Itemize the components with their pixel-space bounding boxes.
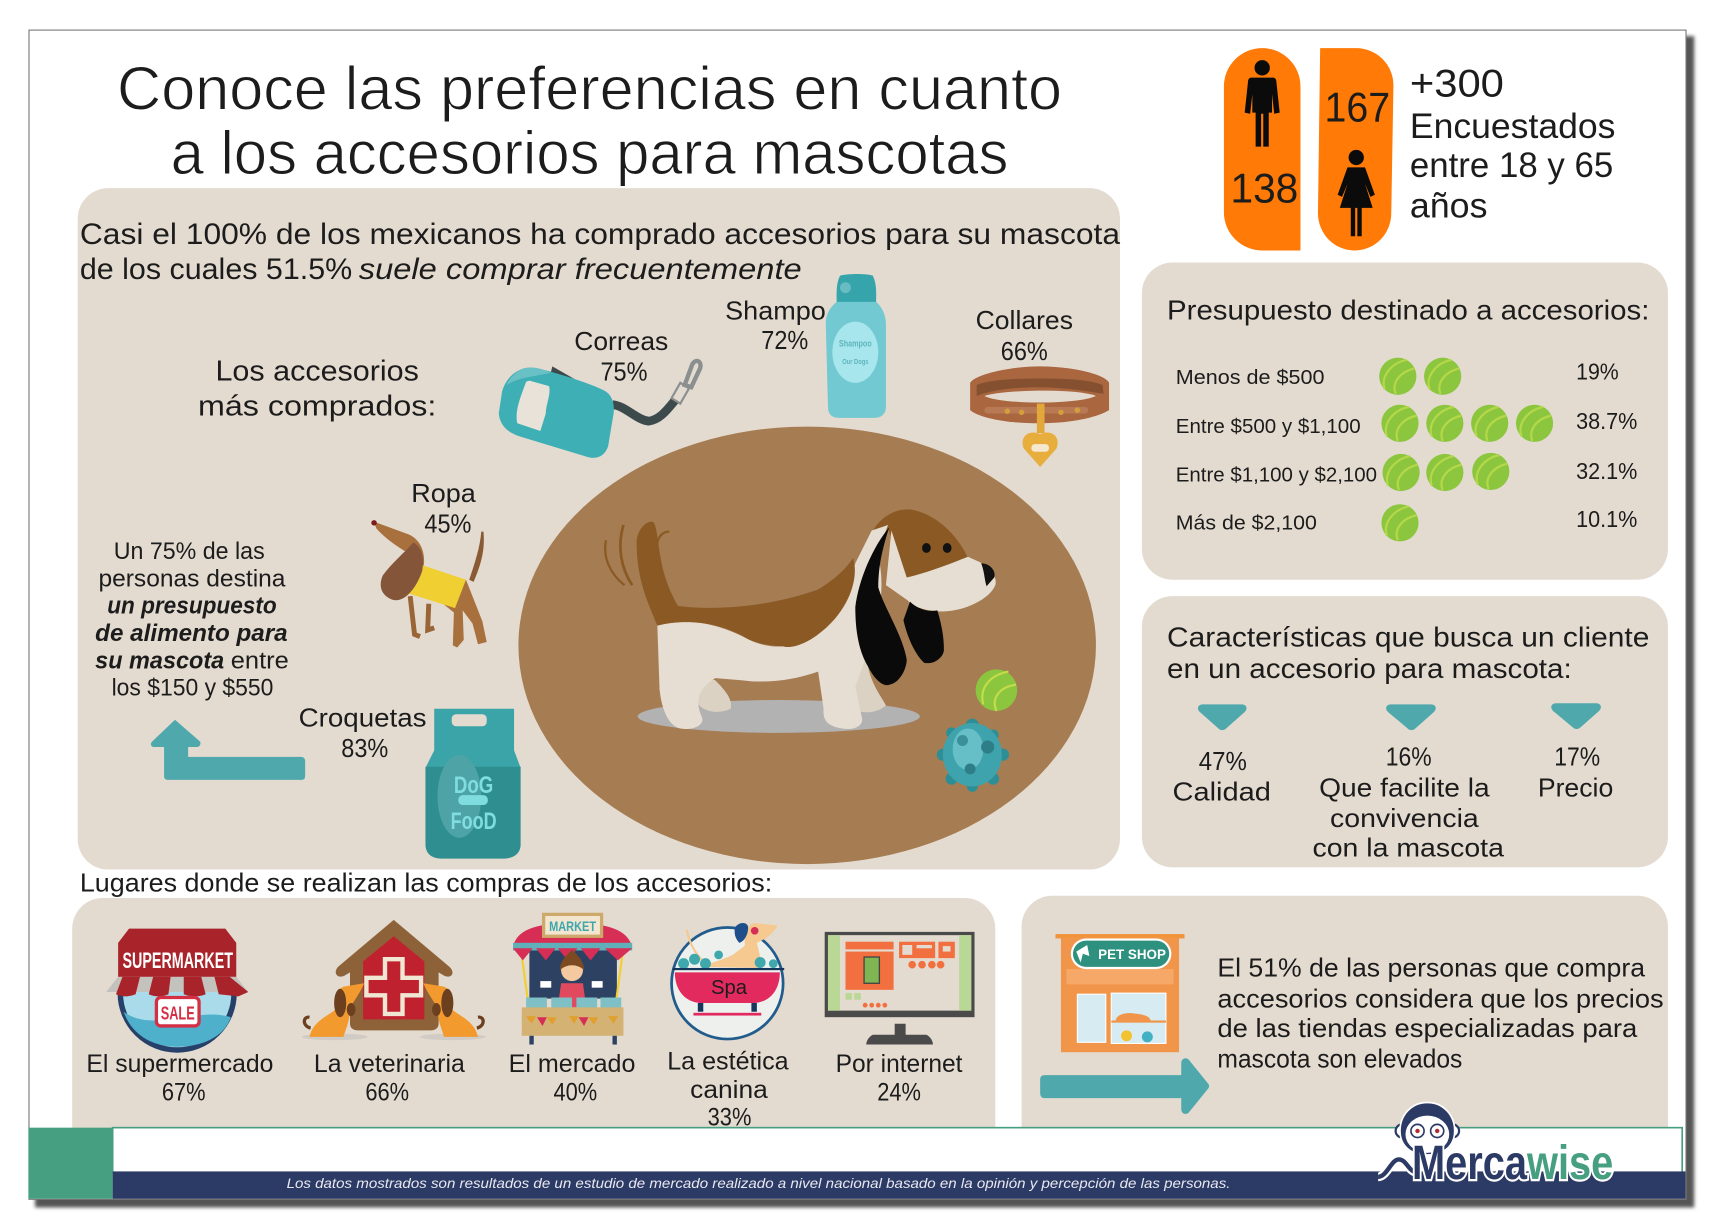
heading: los accesorios más comprados: más comprados: bbox=[198, 391, 436, 423]
text: precios elevados: accesorios considera que los precios bbox=[1217, 985, 1664, 1013]
intro text: Casi el 100% de los mexicanos ha comprado accesorios para su mascota bbox=[80, 218, 1121, 251]
stat: calidad: 47% bbox=[1199, 746, 1247, 776]
label: internet: Por internet bbox=[836, 1050, 963, 1078]
label: supermercado: 67% bbox=[162, 1078, 206, 1106]
label: internet: 24% bbox=[877, 1078, 921, 1106]
label: internet bbox=[836, 1050, 963, 1106]
label: ropa bbox=[411, 478, 476, 539]
text block: presupuesto de alimento bbox=[95, 538, 289, 702]
footer bbox=[28, 1128, 1685, 1199]
heading: los accesorios más comprados: Los accesorios bbox=[215, 356, 419, 388]
icon: spiked ball bbox=[937, 719, 1009, 792]
row: 500 a 1100: 38.7% bbox=[1576, 408, 1637, 434]
number: 138: 138 bbox=[1230, 164, 1298, 211]
heading: presupuesto: Presupuesto destinado a accesorios: bbox=[1167, 294, 1649, 325]
intro text: de los cuales 51.5% bbox=[80, 253, 352, 286]
icon: mercado: MARKET bbox=[549, 919, 596, 935]
text block: presupuesto de alimento: Un 75% de las bbox=[114, 538, 265, 565]
label: collares bbox=[976, 305, 1073, 366]
text block: presupuesto de alimento: un presupuesto bbox=[107, 593, 277, 620]
label: correas bbox=[574, 326, 668, 387]
stat: convivencia: 16% bbox=[1386, 742, 1432, 772]
label: croquetas: 83% bbox=[341, 733, 388, 763]
label: veterinaria: 66% bbox=[365, 1078, 409, 1106]
title: a los accesorios para mascotas bbox=[171, 119, 1008, 187]
text block: presupuesto de alimento: los $150 y $550 bbox=[112, 675, 273, 702]
icon: dog food bag: FooD bbox=[451, 808, 497, 835]
label: estetica canina: canina bbox=[690, 1076, 768, 1104]
icon: estetica bbox=[672, 923, 784, 1039]
row: 1100 a 2100 bbox=[1176, 453, 1637, 491]
icon: shampoo bottle: Our Dogs bbox=[842, 357, 868, 366]
label: shampoo: 72% bbox=[761, 325, 808, 355]
icon: collar bbox=[970, 366, 1109, 467]
row: 1100 a 2100: 32.1% bbox=[1576, 458, 1637, 484]
label: veterinaria: La veterinaria bbox=[314, 1050, 465, 1078]
panel: tiendas especializadas bbox=[1022, 896, 1668, 1138]
label: croquetas: Croquetas bbox=[299, 702, 427, 732]
icon: pet shop bbox=[1055, 934, 1185, 1052]
intro text bbox=[80, 218, 1121, 286]
text block: presupuesto de alimento: personas destina bbox=[98, 565, 286, 592]
footer note: Los datos mostrados son resultados de un estudio de mercado realizado a nivel nacional basado en la opinión y percepción de las personas. bbox=[287, 1176, 1230, 1192]
row: 500 a 1100: Entre $500 y $1,100 bbox=[1176, 415, 1361, 438]
heading: caracteristicas: Características que busca un cliente bbox=[1167, 621, 1649, 652]
dog right bbox=[423, 983, 483, 1037]
icon: supermarket: SALE bbox=[161, 1002, 195, 1023]
icon: small dog with vest bbox=[371, 520, 487, 648]
row: 500 a 1100 bbox=[1176, 405, 1637, 442]
intro text: suele comprar frecuentemente bbox=[359, 253, 802, 286]
text: precios elevados: de las tiendas especializadas para bbox=[1217, 1015, 1638, 1043]
logo: mercawise bbox=[1378, 1103, 1613, 1190]
label: supermercado bbox=[86, 1050, 273, 1106]
illustration: brown circle bbox=[518, 427, 1096, 864]
heading: caracteristicas: en un accesorio para mascota: bbox=[1167, 653, 1572, 684]
label: mercado: 40% bbox=[553, 1078, 597, 1106]
label: supermercado: El supermercado bbox=[86, 1050, 273, 1078]
label: ropa: 45% bbox=[424, 509, 471, 539]
icon: monkey bbox=[1396, 1103, 1459, 1155]
label: veterinaria bbox=[314, 1050, 465, 1106]
text: precios elevados: El 51% de las personas que compra bbox=[1217, 955, 1646, 983]
stat: convivencia: Que facilite la bbox=[1319, 772, 1490, 802]
text: precios elevados: mascota son elevados bbox=[1217, 1046, 1462, 1074]
icon: dog food bag bbox=[425, 709, 521, 859]
label: collares: Collares bbox=[976, 305, 1073, 335]
text: precios elevados bbox=[1217, 955, 1664, 1074]
row: mas de 2100 bbox=[1176, 504, 1637, 541]
pill: men bbox=[1224, 48, 1300, 250]
label: correas: 75% bbox=[600, 357, 648, 387]
row: 1100 a 2100: Entre $1,100 y $2,100 bbox=[1176, 463, 1377, 486]
icon: shampoo bottle bbox=[826, 274, 886, 418]
icon: internet bbox=[825, 932, 975, 1045]
row: mas de 2100: Más de $2,100 bbox=[1176, 511, 1317, 534]
panel: lugares bbox=[72, 898, 995, 1138]
text: encuestados: años bbox=[1410, 187, 1488, 226]
logo: mercawise: Mercawise bbox=[1412, 1136, 1613, 1190]
label: croquetas bbox=[299, 702, 427, 763]
label: correas: Correas bbox=[574, 326, 668, 356]
number: 167: 167 bbox=[1325, 83, 1390, 130]
arrow: right bbox=[1040, 1058, 1209, 1114]
text: encuestados: Encuestados bbox=[1410, 107, 1615, 146]
stat: calidad: Calidad bbox=[1172, 777, 1271, 807]
icon: supermarket bbox=[106, 929, 248, 1050]
text block: presupuesto de alimento: entre bbox=[231, 647, 289, 674]
heading: caracteristicas bbox=[1167, 621, 1649, 684]
icon: pet shop: PET SHOP bbox=[1098, 947, 1166, 963]
icon: veterinaria bbox=[302, 920, 486, 1040]
front far leg bbox=[842, 656, 886, 712]
label: shampoo bbox=[725, 295, 826, 355]
label: shampoo: Shampo bbox=[725, 295, 826, 325]
stat: convivencia: convivencia bbox=[1330, 803, 1479, 833]
footer green block bbox=[28, 1128, 113, 1199]
pill: women bbox=[1318, 48, 1393, 250]
label: estetica canina: La estética bbox=[667, 1048, 789, 1076]
icon: woman bbox=[1338, 150, 1375, 236]
text: encuestados bbox=[1410, 61, 1615, 226]
title: Conoce las preferencias en cuanto bbox=[117, 54, 1062, 122]
icon: dog food bag: DoG bbox=[454, 772, 493, 799]
stat: calidad bbox=[1172, 746, 1271, 807]
text block: presupuesto de alimento: su mascota bbox=[95, 647, 224, 674]
icon: shampoo bottle: Shampoo bbox=[839, 339, 872, 349]
text: encuestados: entre 18 y 65 bbox=[1410, 146, 1613, 185]
label: mercado: El mercado bbox=[509, 1050, 635, 1078]
row: menos de 500 bbox=[1176, 358, 1619, 395]
text: encuestados: +300 bbox=[1410, 61, 1504, 105]
text block: presupuesto de alimento: de alimento para bbox=[95, 620, 288, 647]
stat: precio bbox=[1538, 742, 1613, 802]
panel: presupuesto bbox=[1142, 263, 1668, 580]
icon: supermarket: SUPERMARKET bbox=[122, 948, 233, 973]
stat: precio: 17% bbox=[1554, 742, 1600, 772]
back far leg bbox=[687, 669, 731, 712]
label: ropa: Ropa bbox=[411, 478, 476, 508]
heading: lugares: Lugares donde se realizan las compras de los accesorios: bbox=[80, 867, 772, 897]
icon: mercado bbox=[513, 914, 632, 1045]
heading: los accesorios más comprados bbox=[198, 356, 436, 423]
label: estetica canina: 33% bbox=[708, 1103, 751, 1131]
icon: tennis ball bbox=[976, 669, 1017, 711]
stat: convivencia: con la mascota bbox=[1312, 832, 1504, 862]
panel: encuestados bbox=[1224, 48, 1615, 250]
panel: caracteristicas bbox=[1142, 596, 1668, 867]
row: menos de 500: 19% bbox=[1576, 359, 1619, 385]
row: menos de 500: Menos de $500 bbox=[1176, 366, 1325, 389]
icon: estetica: Spa bbox=[711, 976, 747, 999]
dog left bbox=[304, 983, 364, 1037]
icon: triangle calidad bbox=[1198, 704, 1247, 730]
footer navy bar bbox=[113, 1171, 1685, 1199]
row: mas de 2100: 10.1% bbox=[1576, 506, 1637, 532]
arrow: up-left bbox=[151, 720, 305, 780]
icon: man bbox=[1245, 60, 1280, 147]
panel: accesorios bbox=[78, 188, 1121, 870]
icon: triangle convivencia bbox=[1386, 704, 1436, 730]
stat: precio: Precio bbox=[1538, 772, 1613, 802]
title bbox=[117, 54, 1062, 187]
illustration: basset dog bbox=[605, 509, 996, 733]
label: mercado bbox=[509, 1050, 635, 1106]
icon: triangle precio bbox=[1551, 703, 1601, 729]
icon: leash bbox=[499, 361, 700, 458]
label: collares: 66% bbox=[1001, 336, 1048, 366]
stat: convivencia bbox=[1312, 742, 1504, 862]
label: estetica canina bbox=[667, 1048, 789, 1131]
